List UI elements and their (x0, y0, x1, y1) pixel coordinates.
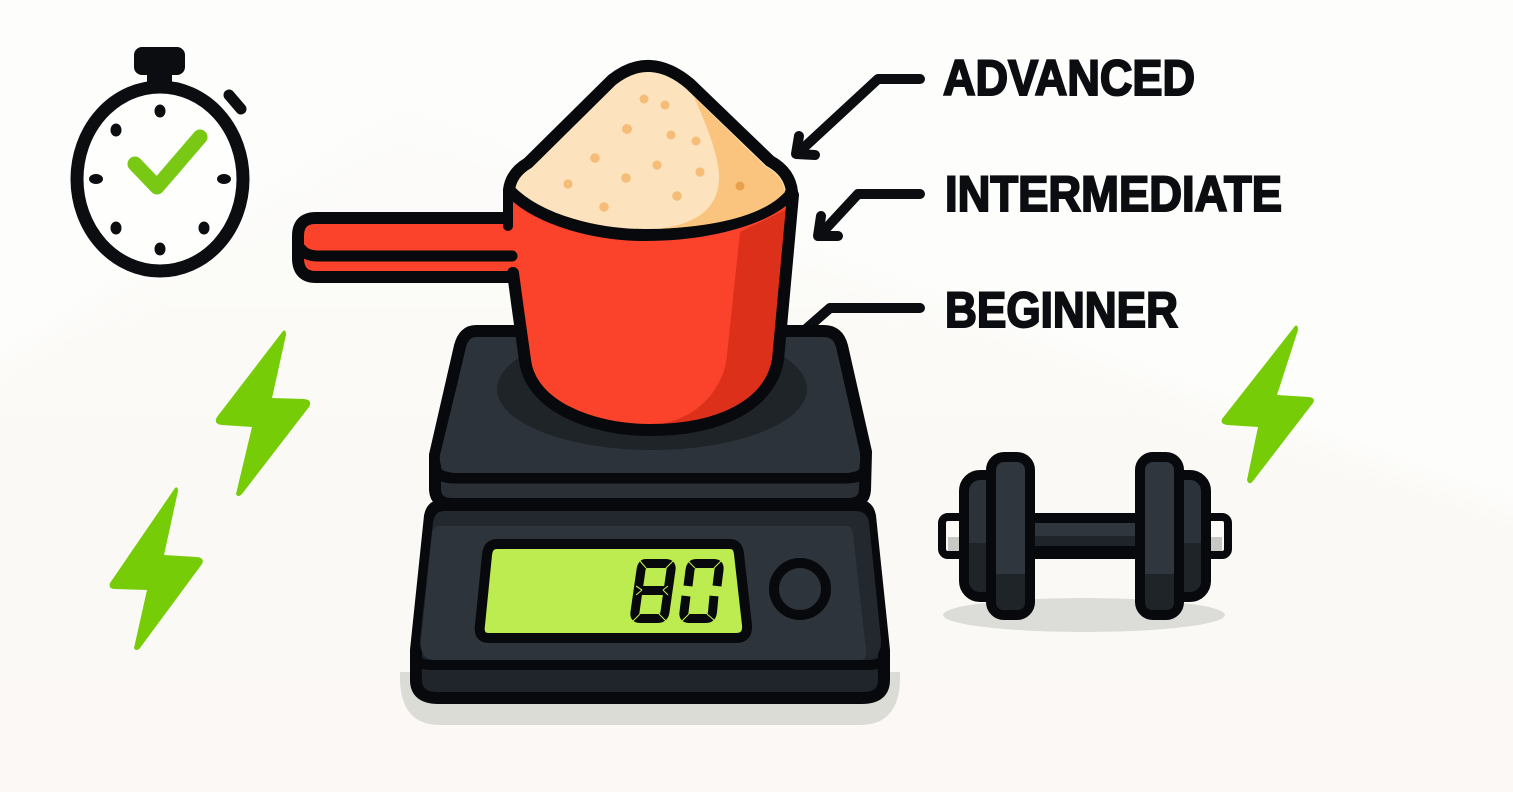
dumbbell outer plates (964, 475, 1006, 597)
powder shadow side (655, 97, 785, 229)
icon: lightning bolt right (1222, 326, 1314, 483)
scale shadow (400, 672, 900, 725)
scale reading (633, 561, 721, 621)
dumbbell bar (1030, 513, 1140, 559)
arrow: advanced (796, 79, 920, 155)
icon: stopwatch (77, 47, 243, 271)
label: beginner: BEGINNER (945, 282, 1178, 338)
scale display (480, 544, 747, 638)
arrow: beginner (806, 308, 920, 329)
icon: lightning bolt lower left (110, 487, 203, 650)
powder mound (509, 66, 792, 235)
icon: red scoop with powder (298, 66, 795, 430)
scale platform (435, 331, 866, 504)
scale button (774, 563, 826, 615)
dumbbell shadow (943, 598, 1225, 632)
arrow: intermediate (818, 194, 920, 236)
dumbbell inner plates (991, 457, 1030, 615)
scoop body (510, 195, 793, 430)
icon: dumbbell (942, 457, 1228, 632)
dumbbell bar ends (942, 517, 972, 555)
icon: kitchen scale (400, 328, 900, 725)
scoop handle (298, 218, 514, 277)
scale base (416, 506, 884, 698)
icon: lightning bolt upper left (216, 330, 310, 496)
label: intermediate: INTERMEDIATE (945, 166, 1282, 222)
label: advanced: ADVANCED (943, 50, 1195, 106)
